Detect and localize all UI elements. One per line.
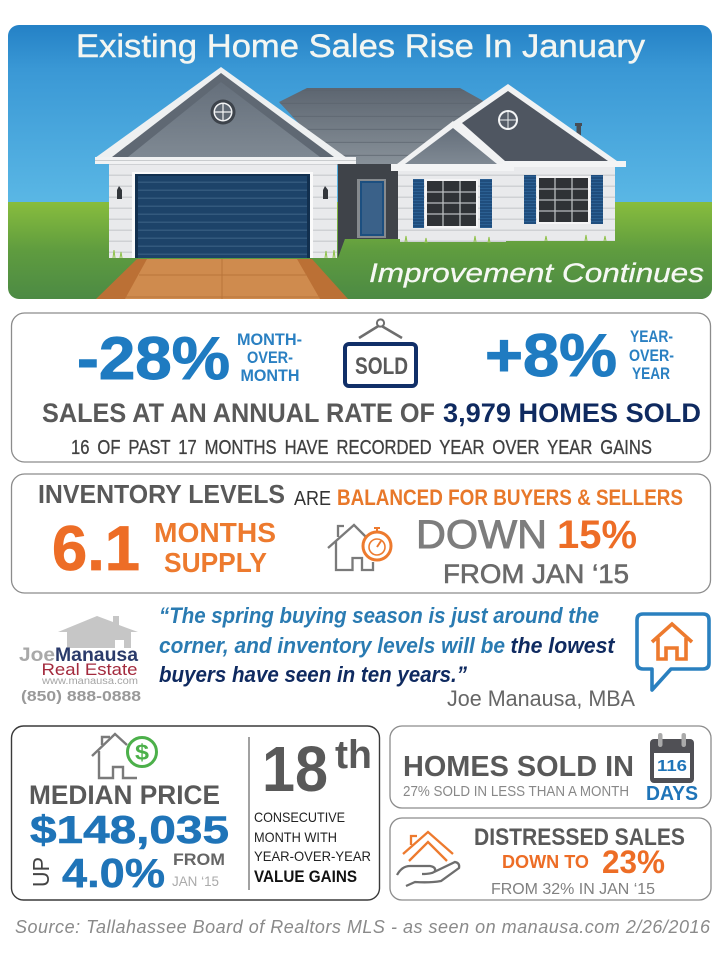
grass lawn xyxy=(8,202,712,299)
logo: Joe Manausa Real Estate: Real Estate xyxy=(42,660,138,679)
distressed percentage: 23% xyxy=(602,844,665,880)
source line: Source: Tallahassee Board of Realtors MLS - as seen on manausa.com 2/26/2016 xyxy=(15,917,711,937)
18th description: CONSECUTIVE xyxy=(254,809,345,825)
18th description: YEAR-OVER-YEAR xyxy=(254,848,371,864)
quote: buyers have seen in ten years.” xyxy=(159,662,468,687)
month-over-month label: OVER- xyxy=(247,348,293,367)
panel: inventory xyxy=(12,474,710,593)
median price figure: $148,035 xyxy=(30,809,229,852)
icon: sold sign: SOLD xyxy=(355,353,408,380)
panel: distressed sales xyxy=(390,818,711,900)
down percentage: 15% xyxy=(557,513,637,557)
months supply figure: 6.1 xyxy=(52,514,140,584)
inventory heading: INVENTORY LEVELS xyxy=(38,479,285,509)
18th description: MONTH WITH xyxy=(254,829,337,845)
down to label: DOWN TO xyxy=(502,852,589,872)
panel: homes sold in days xyxy=(390,726,711,808)
days label: DAYS xyxy=(646,783,698,805)
months supply label: SUPPLY xyxy=(164,547,267,578)
connector word: ARE xyxy=(294,488,331,510)
year-over-year stat: +8% xyxy=(485,322,617,389)
icon: logo house xyxy=(58,616,138,648)
icon: house with dollar xyxy=(92,734,156,778)
quote: corner, and inventory levels will be xyxy=(159,633,505,658)
year-over-year label xyxy=(629,327,674,383)
driveway xyxy=(96,259,348,299)
logo: Joe Manausa Real Estate: (850) 888-0888 xyxy=(21,688,141,705)
homes sold note: 27% SOLD IN LESS THAN A MONTH xyxy=(403,783,629,800)
quote: “The spring buying season is just around the xyxy=(159,603,599,628)
month-over-month label xyxy=(237,330,302,385)
year-over-year label: YEAR xyxy=(632,364,670,383)
month-over-month label: MONTH- xyxy=(237,330,302,349)
distressed sales heading: DISTRESSED SALES xyxy=(474,824,685,851)
down label: DOWN xyxy=(416,513,547,557)
quote attribution: Joe Manausa, MBA xyxy=(447,686,635,711)
icon: calendar xyxy=(650,733,694,783)
18th stat: th xyxy=(335,733,372,777)
logo: Joe Manausa Real Estate xyxy=(19,616,141,705)
month-over-month label: MONTH xyxy=(240,366,300,385)
year-over-year label: YEAR- xyxy=(630,327,673,346)
panel: sales xyxy=(12,313,710,462)
icon: hand holding house xyxy=(397,832,459,886)
icon: house with dollar: $ xyxy=(135,740,149,765)
panel: median price xyxy=(12,726,380,900)
year-over-year label: OVER- xyxy=(629,346,674,365)
18th stat: 18 xyxy=(262,733,328,805)
icon: speech bubble with house xyxy=(637,614,709,690)
icon: sold sign xyxy=(345,319,416,386)
logo: Joe Manausa Real Estate: Joe xyxy=(19,645,55,666)
house illustration xyxy=(95,67,712,299)
month-over-month stat: -28% xyxy=(77,325,230,392)
months supply label xyxy=(154,517,276,578)
subtitle: Improvement Continues xyxy=(369,258,704,288)
logo: Joe Manausa Real Estate: Manausa xyxy=(55,645,138,666)
18th stat xyxy=(262,733,372,805)
distressed comparison: FROM 32% IN JAN ‘15 xyxy=(491,881,655,898)
icon: house with clock xyxy=(328,525,391,570)
homes sold heading: HOMES SOLD IN xyxy=(403,751,634,783)
quote: the lowest xyxy=(510,633,616,658)
median price heading: MEDIAN PRICE xyxy=(29,780,220,810)
hero banner: house illustration xyxy=(8,25,712,299)
18th description: VALUE GAINS xyxy=(254,867,357,886)
annual rate text: SALES AT AN ANNUAL RATE OF xyxy=(42,398,435,428)
title: Existing Home Sales Rise In January xyxy=(76,28,645,64)
from label: FROM xyxy=(173,850,225,869)
from date: FROM JAN ‘15 xyxy=(443,559,629,589)
percentage up: 4.0% xyxy=(62,850,165,896)
sky background xyxy=(8,25,712,203)
18th description xyxy=(254,809,371,886)
january label: JAN ‘15 xyxy=(172,873,219,889)
logo: Joe Manausa Real Estate: www.manausa.com xyxy=(41,676,138,687)
icon: calendar: 116 xyxy=(657,758,687,775)
quote xyxy=(159,603,616,687)
homes sold figure: 3,979 HOMES SOLD xyxy=(443,398,701,428)
months supply label: MONTHS xyxy=(154,517,276,548)
up label: UP xyxy=(28,857,54,887)
